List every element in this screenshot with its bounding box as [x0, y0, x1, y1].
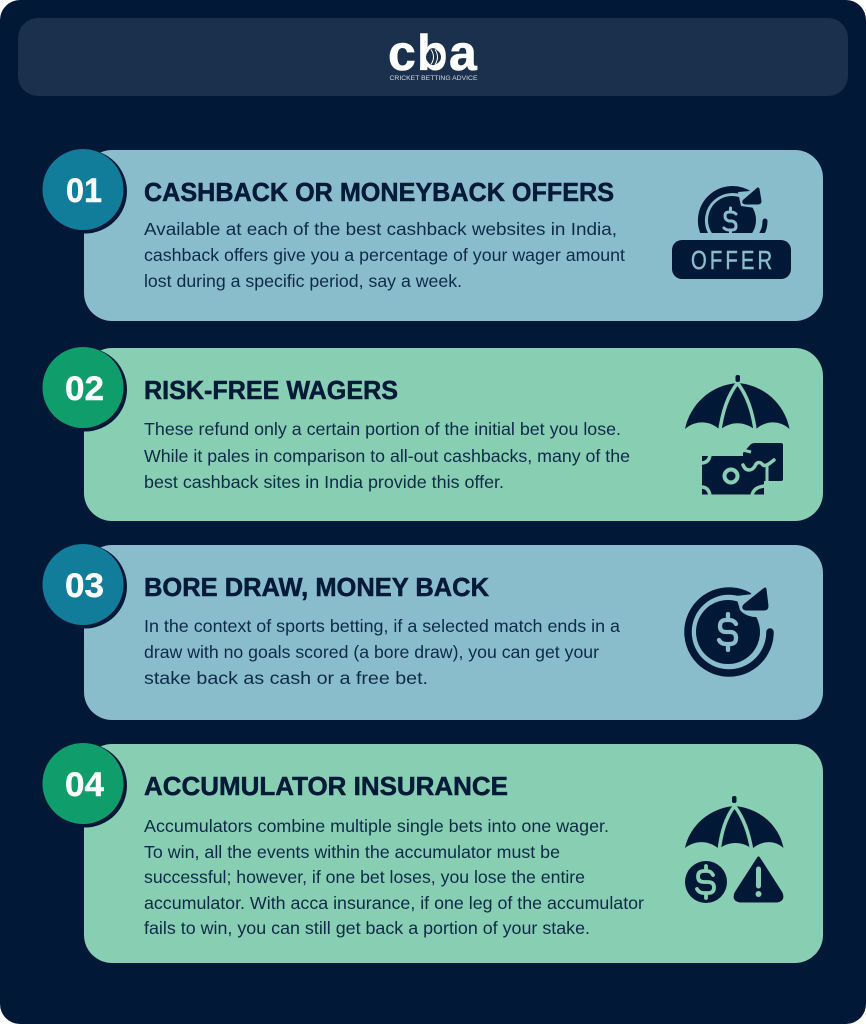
logo: CRICKET BETTING ADVICE — [390, 75, 478, 82]
icon: offer coin: OFFER — [691, 246, 772, 275]
panel 3: bore draw — [42, 544, 823, 720]
heading: ACCUMULATOR INSURANCE — [144, 771, 508, 801]
panel 4: accumulator insurance — [42, 743, 823, 963]
body text: accumulator. With acca insurance, if one leg of the accumulator — [144, 893, 644, 913]
body text — [144, 816, 644, 938]
header bar — [18, 18, 848, 96]
body text: lost during a specific period, say a week. — [144, 271, 462, 291]
number badge 01 — [42, 149, 127, 234]
number badge 03: 03 — [65, 567, 104, 605]
body text: To win, all the events within the accumulator must be — [144, 842, 560, 862]
panel 1: cashback offers — [42, 149, 823, 321]
body text: fails to win, you can still get back a portion of your stake. — [144, 918, 590, 938]
body text: These refund only a certain portion of the initial bet you lose. — [144, 419, 621, 439]
number badge 02: 02 — [65, 370, 104, 408]
number badge 04: 04 — [65, 766, 104, 804]
icon: refund coin — [688, 589, 770, 673]
heading: BORE DRAW, MONEY BACK — [144, 572, 489, 602]
heading: CASHBACK OR MONEYBACK OFFERS — [144, 177, 614, 207]
body text — [144, 419, 630, 492]
body text — [144, 616, 620, 688]
icon: offer coin — [672, 189, 791, 279]
number badge 03 — [42, 544, 127, 628]
body text: While it pales in comparison to all-out cashbacks, many of the — [144, 446, 630, 466]
body text — [144, 219, 625, 291]
body text: Available at each of the best cashback websites in India, — [144, 219, 617, 239]
logo: cba — [388, 25, 478, 81]
icon: umbrella, coin and warning — [685, 796, 784, 903]
body text: best cashback sites in India provide this offer. — [144, 472, 504, 492]
number badge 02 — [42, 347, 127, 432]
body text: stake back as cash or a free bet. — [144, 668, 428, 688]
icon: umbrella and money — [685, 375, 790, 496]
body text: Accumulators combine multiple single bets into one wager. — [144, 816, 609, 836]
heading: RISK-FREE WAGERS — [144, 375, 398, 405]
body text: successful; however, if one bet loses, you lose the entire — [144, 867, 585, 887]
body text: draw with no goals scored (a bore draw), you can get your — [144, 642, 599, 662]
number badge 04 — [42, 743, 127, 828]
number badge 01: 01 — [66, 172, 102, 210]
body text: In the context of sports betting, if a selected match ends in a — [144, 616, 620, 636]
panel 2: risk-free wagers — [42, 347, 823, 521]
body text: cashback offers give you a percentage of your wager amount — [144, 245, 625, 265]
